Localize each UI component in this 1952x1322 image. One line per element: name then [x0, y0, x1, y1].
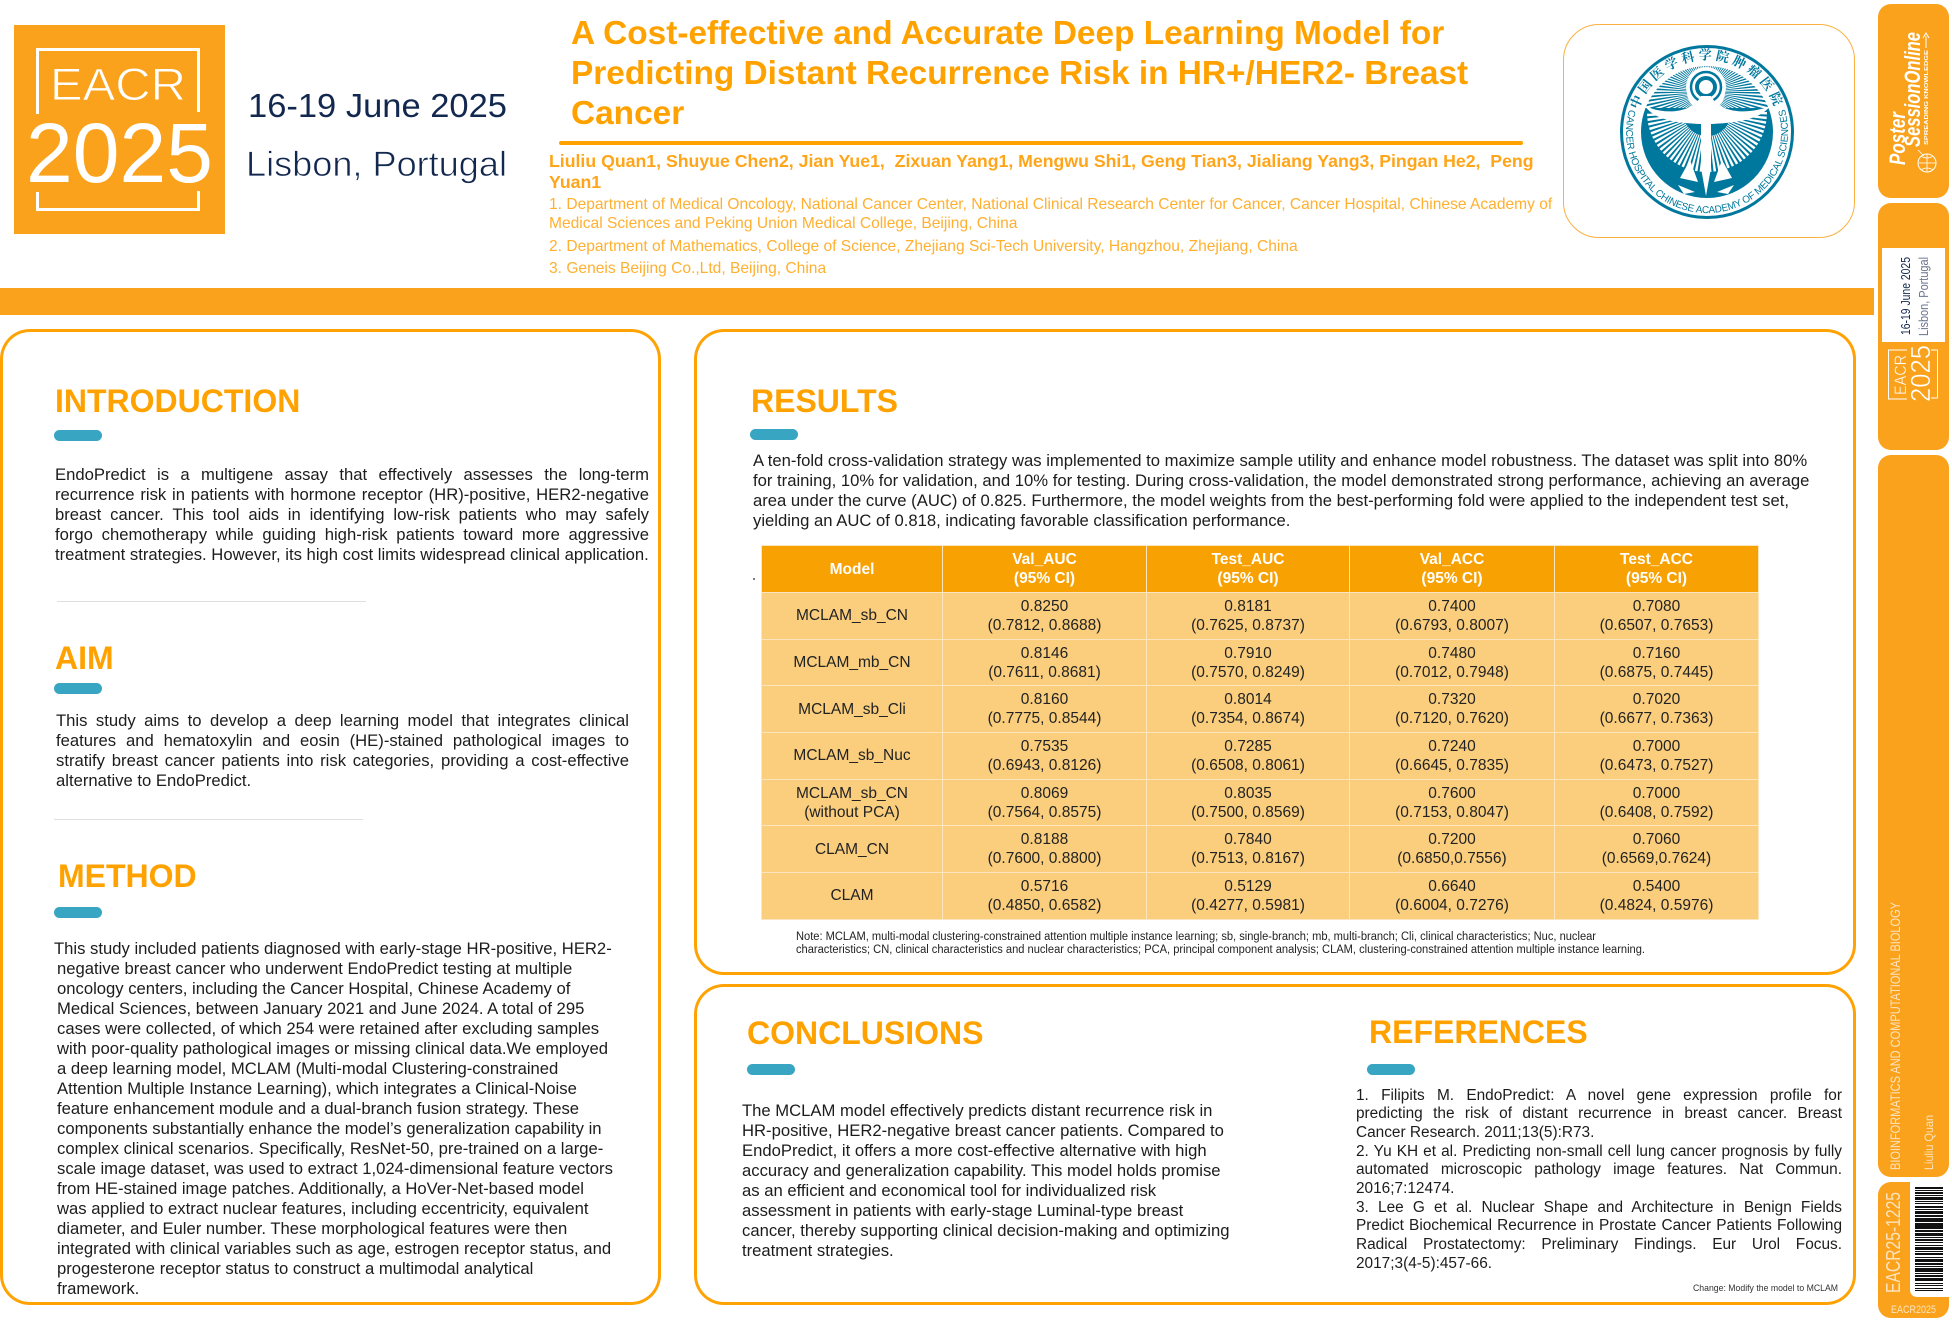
- method text: complex clinical scenarios. Specifically, ResNet-50, pre-trained on a large-: [57, 1138, 603, 1158]
- method text: integrated with clinical variables such as age, estrogen receptor status, and: [57, 1238, 611, 1258]
- introduction text: recurrence risk in patients with hormone receptor (HR)-positive, HER2-negative: [55, 484, 649, 504]
- results table: CLAM_CN: [815, 841, 889, 858]
- conference date and place: [246, 87, 507, 184]
- references text: automated microscopic pathology image features. Nat Commun.: [1356, 1161, 1842, 1178]
- results table: (0.7354, 0.8674): [1191, 710, 1305, 727]
- results table: (0.6408, 0.7592): [1600, 804, 1713, 821]
- side tab: poster id and barcode: EACR2025: [1891, 1304, 1936, 1316]
- authors: [549, 151, 1534, 192]
- affiliations: 1. Department of Medical Oncology, National Cancer Center, National Clinical Research Center for Cancer, Cancer Hospital, Chinese Academy of: [549, 196, 1552, 213]
- results table: (0.7513, 0.8167): [1191, 850, 1305, 867]
- results table: (95% CI): [1014, 570, 1075, 587]
- results table: (0.7120, 0.7620): [1395, 710, 1509, 727]
- EACR 2025 logo: [14, 25, 225, 234]
- results table: 0.7060: [1633, 831, 1680, 848]
- heading: references: REFERENCES: [1369, 1014, 1588, 1050]
- introduction text: breast cancer. This tool aids in identifying low-risk patients who may safely: [55, 504, 649, 524]
- references text: predicting the risk of distant recurrence in breast cancer. Breast: [1356, 1105, 1842, 1122]
- results table: (0.7564, 0.8575): [988, 804, 1101, 821]
- method text: a deep learning model, MCLAM (Multi-modal Clustering-constrained: [57, 1058, 558, 1078]
- results table: MCLAM_sb_CN: [796, 607, 908, 624]
- title: [571, 15, 1468, 132]
- results table: 0.5716: [1021, 878, 1068, 895]
- results table: MCLAM_mb_CN: [793, 654, 911, 671]
- aim text: alternative to EndoPredict.: [56, 770, 251, 790]
- results table: (0.4850, 0.6582): [988, 897, 1101, 914]
- side tab: PosterSessionOnline: SPREADING KNOWLEDGE: [1924, 49, 1930, 145]
- results table: 0.5400: [1633, 878, 1680, 895]
- method text: feature enhancement module and a dual-branch fusion strategy. These: [57, 1098, 579, 1118]
- method text: This study included patients diagnosed with early-stage HR-positive, HER2-: [54, 938, 612, 958]
- accent pill: [54, 683, 102, 694]
- results table: 0.6640: [1428, 878, 1476, 895]
- references text: Radical Prostatectomy: Preliminary Findings. Eur Urol Focus.: [1356, 1236, 1842, 1253]
- results table: 0.8035: [1224, 785, 1272, 802]
- side tab: conference details: EACR: [1891, 355, 1910, 395]
- side tab: conference details: 2025: [1905, 345, 1936, 402]
- method text: framework.: [57, 1278, 139, 1298]
- icon: hospital seal: 中国医学科学院肿瘤医院: [1630, 48, 1783, 108]
- affiliations: Medical Sciences and Peking Union Medical College, Beijing, China: [549, 215, 1017, 232]
- title: Predicting Distant Recurrence Risk in HR+/HER2- Breast: [571, 55, 1468, 92]
- orange header bar: [0, 288, 1874, 315]
- heading: conclusions: CONCLUSIONS: [747, 1015, 983, 1051]
- results table: (95% CI): [1217, 570, 1279, 587]
- results table: (0.7153, 0.8047): [1395, 804, 1509, 821]
- references text: 2017;3(4-5):457-66.: [1356, 1255, 1492, 1272]
- conference date and place: 16-19 June 2025: [248, 87, 507, 124]
- EACR 2025 logo: EACR: [50, 59, 186, 110]
- results table: Val_AUC: [1012, 551, 1077, 568]
- results table: (0.7500, 0.8569): [1191, 804, 1305, 821]
- results table: 0.7200: [1428, 831, 1476, 848]
- results text: area under the curve (AUC) of 0.825. Furthermore, the model weights from the best-performing fold were applied to the independent test set,: [753, 490, 1789, 510]
- results table: (0.4277, 0.5981): [1191, 897, 1305, 914]
- introduction text: [55, 464, 649, 564]
- conference date and place: Lisbon, Portugal: [246, 145, 507, 184]
- results table: Model: [830, 560, 874, 578]
- results table: 0.7020: [1633, 691, 1680, 708]
- references text: Cancer Research. 2011;13(5):R73.: [1356, 1124, 1594, 1141]
- side tab: track and presenter: BIOINFORMATICS AND COMPUTATIONAL BIOLOGY: [1888, 902, 1903, 1170]
- conclusions text: HR-positive, HER2-negative breast cancer patients. Compared to: [742, 1120, 1224, 1140]
- introduction text: forgo chemotherapy while guiding high-risk patients toward more aggressive: [55, 524, 649, 544]
- side tab: PosterSessionOnline: Poster: [1885, 111, 1910, 165]
- references text: [1356, 1086, 1842, 1272]
- results table: 0.7480: [1428, 645, 1476, 662]
- results table: (0.7625, 0.8737): [1191, 617, 1305, 634]
- results table: (95% CI): [1626, 570, 1687, 587]
- results table: 0.7080: [1633, 598, 1680, 615]
- results table: 0.7600: [1428, 785, 1476, 802]
- aim text: stratify breast cancer patients into risk categories, providing a cost-effective: [56, 750, 629, 770]
- title underline: [559, 141, 1523, 145]
- results table: (0.6793, 0.8007): [1395, 617, 1509, 634]
- results table: 0.8250: [1021, 598, 1068, 615]
- results table: 0.7320: [1428, 691, 1476, 708]
- results table: 0.8160: [1021, 691, 1068, 708]
- method text: [54, 938, 613, 1298]
- results table: 0.8188: [1021, 831, 1068, 848]
- results table: 0.7910: [1224, 645, 1272, 662]
- results table: (0.7012, 0.7948): [1395, 664, 1509, 681]
- panel: conclusions and references: [694, 984, 1856, 1305]
- results text: for training, 10% for validation, and 10% for testing. During cross-validation, the model demonstrated strong performance, achieving an average: [753, 470, 1809, 490]
- results text: yielding an AUC of 0.818, indicating favorable classification performance.: [753, 510, 1290, 530]
- results table: (95% CI): [1421, 570, 1483, 587]
- results table: (0.6004, 0.7276): [1395, 897, 1509, 914]
- results table: (0.6677, 0.7363): [1600, 710, 1713, 727]
- results table: (without PCA): [804, 804, 900, 821]
- conclusions text: treatment strategies.: [742, 1240, 894, 1260]
- aim text: This study aims to develop a deep learning model that integrates clinical: [56, 710, 629, 730]
- icon: hospital seal: CANCER HOSPITAL CHINESE ACADEMY OF MEDICAL SCIENCES: [1626, 110, 1788, 214]
- aim text: features and hematoxylin and eosin (HE)-stained pathological images to: [56, 730, 629, 750]
- results table: (0.6508, 0.8061): [1191, 757, 1305, 774]
- title: Cancer: [571, 95, 684, 132]
- results table: (0.6569,0.7624): [1602, 850, 1711, 867]
- conclusions text: The MCLAM model effectively predicts distant recurrence risk in: [742, 1100, 1212, 1120]
- results text: A ten-fold cross-validation strategy was implemented to maximize sample utility and enhance model robustness. The dataset was split into 80%: [753, 450, 1807, 470]
- introduction text: treatment strategies. However, its high cost limits widespread clinical application.: [55, 544, 649, 564]
- results table: MCLAM_sb_Nuc: [793, 747, 911, 764]
- results table: 0.7400: [1428, 598, 1476, 615]
- references text: 2016;7:12474.: [1356, 1180, 1454, 1197]
- results table: (0.7611, 0.8681): [988, 664, 1101, 681]
- aim text: [56, 710, 629, 790]
- method text: from HE-stained image patches. Additionally, a HoVer-Net-based model: [57, 1178, 584, 1198]
- method text: scale image dataset, was used to extract 1,024-dimensional feature vectors: [57, 1158, 613, 1178]
- accent pill: [1367, 1064, 1415, 1075]
- results table: CLAM: [830, 887, 874, 904]
- EACR 2025 logo: 2025: [26, 106, 213, 200]
- conclusions text: accuracy and generalization capability. This model holds promise: [742, 1160, 1221, 1180]
- results table: 0.7160: [1633, 645, 1680, 662]
- side tab: track and presenter: [1878, 455, 1949, 1177]
- conclusions text: cancer, thereby supporting clinical decision-making and optimizing: [742, 1220, 1229, 1240]
- results table: (0.6507, 0.7653): [1600, 617, 1713, 634]
- results table: Test_AUC: [1212, 551, 1284, 568]
- method text: with poor-quality pathological images or missing clinical data.We employed: [57, 1038, 608, 1058]
- title: A Cost-effective and Accurate Deep Learning Model for: [571, 15, 1444, 52]
- affiliations: 3. Geneis Beijing Co.,Ltd, Beijing, China: [549, 260, 826, 277]
- conclusions text: as an efficient and economical tool for individualized risk: [742, 1180, 1156, 1200]
- table note: characteristics; CN, clinical characteristics and nuclear characteristics; PCA, principal component analysis; CLAM, clustering-constrained attention multiple instance learning.: [796, 944, 1645, 956]
- results table: 0.8146: [1021, 645, 1068, 662]
- authors: Liuliu Quan1, Shuyue Chen2, Jian Yue1, Zixuan Yang1, Mengwu Shi1, Geng Tian3, Jialiang Yang3, Pingan He2, Peng: [549, 151, 1534, 171]
- results table: 0.7285: [1224, 738, 1272, 755]
- method text: oncology centers, including the Cancer Hospital, Chinese Academy of: [57, 978, 570, 998]
- method text: progesterone receptor status to construct a multimodal analytical: [57, 1258, 533, 1278]
- method text: components substantially enhance the model’s generalization capability in: [57, 1118, 602, 1138]
- results text: [753, 450, 1809, 530]
- results table: 0.8014: [1224, 691, 1272, 708]
- results table: 0.8181: [1224, 598, 1272, 615]
- results table: (0.7600, 0.8800): [988, 850, 1101, 867]
- hospital logo box: [1563, 24, 1855, 238]
- results table: (0.6943, 0.8126): [988, 757, 1101, 774]
- introduction text: EndoPredict is a multigene assay that effectively assesses the long-term: [55, 464, 649, 484]
- heading: aim: AIM: [55, 640, 114, 676]
- results table: 0.7535: [1021, 738, 1068, 755]
- results table: 0.5129: [1224, 878, 1272, 895]
- panel: results: [694, 329, 1856, 975]
- side tab: PosterSessionOnline: [1878, 4, 1949, 198]
- panel: introduction, aim, method: [0, 329, 661, 1305]
- results table: 0.7000: [1633, 738, 1680, 755]
- side tab: conference details: [1878, 203, 1949, 450]
- results table: (0.7570, 0.8249): [1191, 664, 1305, 681]
- results table: 0.7000: [1633, 785, 1680, 802]
- side tab: conference details: 16-19 June 2025: [1899, 257, 1913, 335]
- heading: introduction: INTRODUCTION: [55, 383, 300, 419]
- results table: MCLAM_sb_Cli: [798, 701, 906, 718]
- table note: [796, 931, 1645, 956]
- references text: Predict Biochemical Recurrence in Prostate Cancer Patients Following: [1356, 1217, 1842, 1234]
- results table: 0.7240: [1428, 738, 1476, 755]
- conclusions text: assessment in patients with early-stage Luminal-type breast: [742, 1200, 1183, 1220]
- references text: 3. Lee G et al. Nuclear Shape and Architecture in Benign Fields: [1356, 1199, 1842, 1216]
- table note: Note: MCLAM, multi-modal clustering-constrained attention multiple instance learning; sb, single-branch; mb, multi-branch; Cli, clinical characteristics; Nuc, nuclear: [796, 931, 1596, 943]
- results table: (0.7775, 0.8544): [988, 710, 1101, 727]
- results table: (0.6645, 0.7835): [1395, 757, 1509, 774]
- references text: 1. Filipits M. EndoPredict: A novel gene expression profile for: [1356, 1086, 1842, 1104]
- method text: Medical Sciences, between January 2021 and June 2024. A total of 295: [57, 998, 584, 1018]
- results table: Test_ACC: [1620, 551, 1693, 568]
- side tab: poster id and barcode: [1878, 1182, 1949, 1318]
- method text: was applied to extract nuclear features, including eccentricity, equivalent: [57, 1198, 589, 1218]
- results table: MCLAM_sb_CN: [796, 785, 908, 802]
- results table: [761, 545, 1759, 920]
- heading: results: RESULTS: [751, 383, 898, 419]
- accent pill: [54, 907, 102, 918]
- results table: (0.6875, 0.7445): [1600, 664, 1713, 681]
- accent pill: [750, 429, 798, 440]
- authors: Yuan1: [549, 172, 601, 192]
- icon: hospital seal: [1620, 45, 1794, 219]
- conclusions text: EndoPredict, it offers a more cost-effective alternative with high: [742, 1140, 1207, 1160]
- results table: (0.6850,0.7556): [1397, 850, 1507, 867]
- method text: cases were collected, of which 254 were retained after excluding samples: [57, 1018, 599, 1038]
- results table: 0.7840: [1224, 831, 1272, 848]
- accent pill: [747, 1064, 795, 1075]
- results table: 0.8069: [1021, 785, 1068, 802]
- results table: (0.4824, 0.5976): [1600, 897, 1713, 914]
- stray dot: [753, 578, 755, 580]
- affiliations: 2. Department of Mathematics, College of Science, Zhejiang Sci-Tech University, Hangzhou, Zhejiang, China: [549, 238, 1298, 255]
- references text: 2. Yu KH et al. Predicting non-small cell lung cancer prognosis by fully: [1356, 1143, 1842, 1160]
- method text: diameter, and Euler number. These morphological features were then: [57, 1218, 567, 1238]
- heading: method: METHOD: [58, 858, 197, 894]
- results table: (0.6473, 0.7527): [1600, 757, 1713, 774]
- affiliations: [549, 196, 1552, 277]
- side tab: conference details: Lisbon, Portugal: [1916, 257, 1931, 336]
- results table: Val_ACC: [1420, 551, 1484, 568]
- accent pill: [54, 430, 102, 441]
- method text: Attention Multiple Instance Learning), which integrates a Clinical-Noise: [57, 1078, 577, 1098]
- conclusions text: [742, 1100, 1229, 1260]
- method text: negative breast cancer who underwent EndoPredict testing at multiple: [57, 958, 572, 978]
- results table: (0.7812, 0.8688): [988, 617, 1101, 634]
- side tab: track and presenter: Liuliu Quan: [1922, 1115, 1936, 1170]
